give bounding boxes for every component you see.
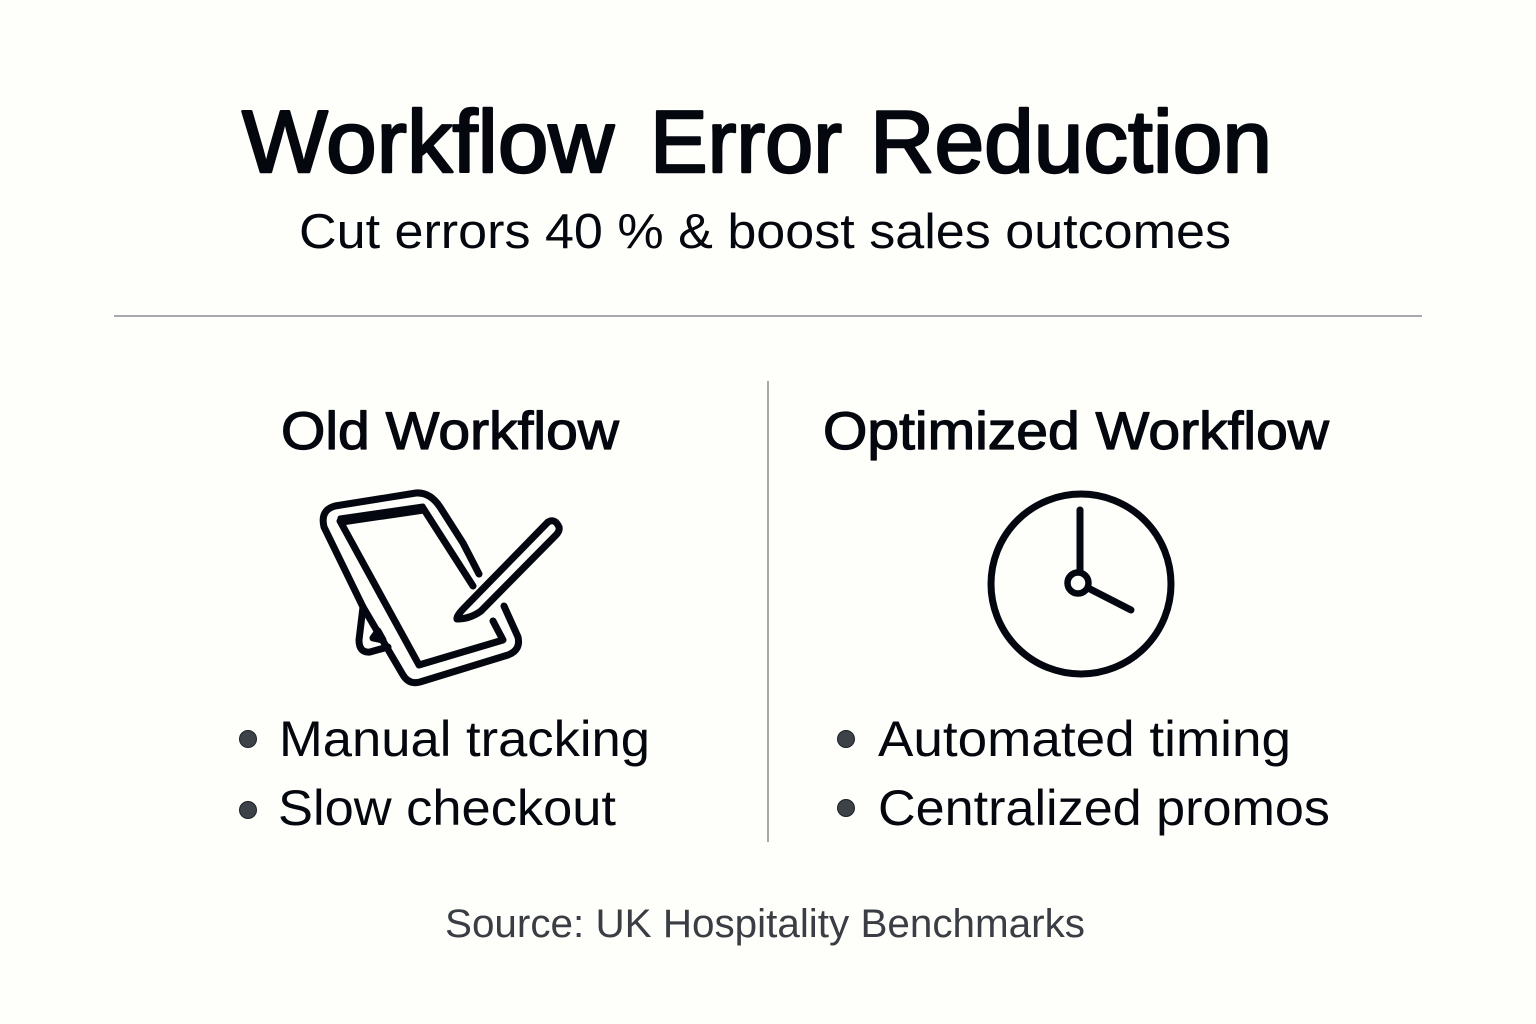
heading: old workflow: Old Workflow <box>281 402 620 461</box>
bullet list: optimized workflow: Automated timing <box>878 711 1291 767</box>
heading: optimized workflow: Optimized Workflow <box>823 402 1330 461</box>
bullet list: old workflow: Slow checkout <box>278 780 616 836</box>
bullet list: optimized workflow: Centralized promos <box>878 780 1330 836</box>
icon: clock <box>991 494 1171 674</box>
bullet list: optimized workflow <box>838 711 1330 836</box>
icon: tablet and stylus <box>323 493 559 683</box>
title: Reduction <box>870 92 1272 191</box>
title: Workflow <box>242 92 614 191</box>
title <box>242 92 1272 191</box>
source note: Source: UK Hospitality Benchmarks <box>445 902 1085 946</box>
bullet list: old workflow <box>240 711 650 836</box>
subtitle: Cut errors 40 % & boost sales outcomes <box>299 205 1231 259</box>
title: Error <box>650 92 842 191</box>
panel: optimized workflow <box>823 402 1330 836</box>
bullet list: old workflow: Manual tracking <box>279 711 650 767</box>
panel: old workflow <box>240 402 650 836</box>
